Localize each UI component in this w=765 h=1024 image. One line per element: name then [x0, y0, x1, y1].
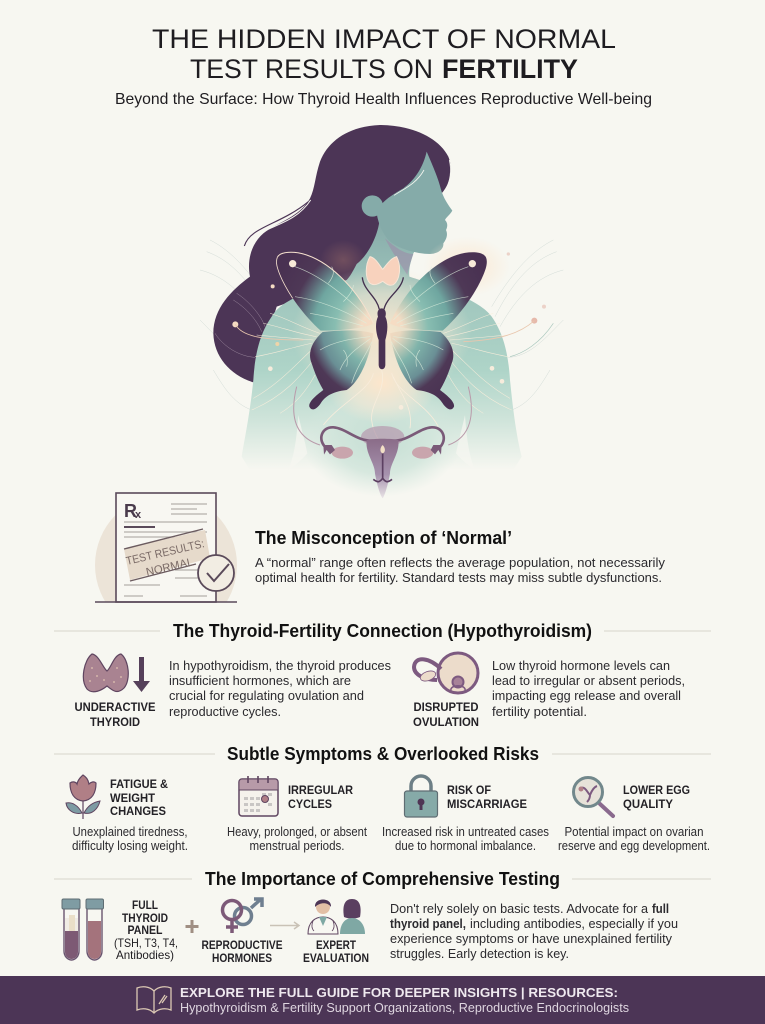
subtitle: Beyond the Surface: How Thyroid Health Influences Reproductive Well-being — [115, 91, 652, 108]
label: risk of miscarriage: RISK OF — [447, 783, 491, 797]
text: testing advice: struggles. Early detection is key. — [390, 946, 569, 961]
heading: comprehensive testing: The Importance of Comprehensive Testing — [205, 869, 560, 889]
label: risk of miscarriage — [447, 783, 527, 811]
label: reproductive hormones: REPRODUCTIVE — [202, 938, 282, 952]
heading: subtle symptoms: Subtle Symptoms & Overlooked Risks — [227, 744, 539, 764]
icon: Rx test results document: NORMAL — [145, 556, 195, 579]
text: hypothyroidism explanation: In hypothyroidism, the thyroid produces — [169, 658, 391, 673]
text: cycles description: menstrual periods. — [250, 838, 344, 853]
title: TEST RESULTS ON — [190, 54, 433, 84]
descending nerve lines — [323, 370, 438, 445]
icon: wilting tulip — [66, 775, 100, 819]
text: hypothyroidism explanation: insufficient hormones, which are — [169, 673, 351, 688]
text: misconception body: A “normal” range often reflects the average population, not necessarily — [255, 555, 665, 570]
icon: open book — [137, 987, 171, 1013]
energy dots — [232, 252, 553, 410]
label: lower egg quality: QUALITY — [623, 797, 673, 811]
text: fatigue description: difficulty losing weight. — [72, 838, 188, 853]
text: testing advice: full — [652, 901, 669, 916]
text: hypothyroidism explanation: crucial for regulating ovulation and — [169, 688, 364, 703]
text: egg quality description — [558, 824, 710, 853]
icon: padlock — [404, 776, 438, 817]
thyroid — [366, 257, 400, 285]
footer text: EXPLORE THE FULL GUIDE FOR DEEPER INSIGHTS | RESOURCES: — [180, 985, 618, 1000]
icon: calendar — [239, 776, 278, 816]
text: testing advice: Don't rely solely on basic tests. Advocate for a — [390, 901, 649, 916]
icon: magnifying glass — [574, 778, 613, 816]
label: full thyroid panel: (TSH, T3, T4, — [114, 936, 178, 950]
label: reproductive hormones — [202, 938, 282, 965]
panel: thyroid-fertility connection — [54, 621, 711, 729]
butterfly glow — [292, 237, 510, 423]
panel: misconception of normal — [95, 492, 665, 603]
energy rays — [252, 313, 512, 413]
label: disrupted ovulation: OVULATION — [413, 715, 479, 729]
text: cycles description — [227, 824, 367, 853]
label: fatigue: FATIGUE & — [110, 777, 168, 791]
label: risk of miscarriage: MISCARRIAGE — [447, 797, 527, 811]
uterus — [294, 387, 471, 498]
label: lower egg quality: LOWER EGG — [623, 783, 690, 797]
label: lower egg quality — [623, 783, 690, 811]
icon: Rx test results document — [95, 492, 237, 603]
title block — [115, 24, 652, 108]
text: testing advice: thyroid panel, — [390, 916, 466, 931]
text: hypothyroidism explanation — [169, 658, 391, 719]
icon: underactive thyroid — [83, 654, 150, 692]
label: full thyroid panel: PANEL — [128, 923, 162, 937]
label: underactive thyroid: UNDERACTIVE — [74, 700, 156, 714]
label: full thyroid panel: THYROID — [122, 911, 168, 925]
heading: thyroid-fertility connection: The Thyroid-Fertility Connection (Hypothyroidism) — [173, 621, 592, 641]
text: testing advice — [390, 901, 678, 961]
text: misconception body: optimal health for fertility. Standard tests may miss subtle dysfunctions. — [255, 570, 662, 585]
icon: doctor and patient — [308, 899, 365, 934]
footer text — [180, 985, 629, 1015]
title: THE HIDDEN IMPACT OF NORMAL — [152, 24, 616, 54]
icon: Rx test results document: TEST RESULTS: — [125, 538, 206, 568]
icon: disrupted ovulation — [414, 653, 478, 693]
text: fatigue description — [72, 824, 188, 853]
item: risk of miscarriage — [382, 776, 549, 853]
text: egg quality description: reserve and egg development. — [558, 838, 710, 853]
label: reproductive hormones: HORMONES — [212, 951, 272, 965]
label: disrupted ovulation: DISRUPTED — [414, 700, 479, 714]
text: ovulation explanation — [492, 658, 685, 719]
label: irregular cycles: CYCLES — [288, 797, 332, 811]
icon: gender symbols — [222, 899, 262, 933]
icon: Rx test results document: x — [135, 509, 142, 521]
icon: blood test tubes — [62, 899, 104, 960]
label: underactive thyroid — [74, 700, 156, 729]
underarm gaps — [288, 415, 475, 470]
text: testing advice: including antibodies, especially if you — [470, 916, 678, 931]
label: irregular cycles: IRREGULAR — [288, 783, 353, 797]
illustration: woman silhouette with butterfly — [200, 125, 563, 498]
hair — [213, 125, 451, 382]
body — [242, 213, 522, 470]
footer text: Hypothyroidism & Fertility Support Organizations, Reproductive Endocrinologists — [180, 1001, 629, 1015]
item: fatigue and weight changes — [66, 775, 188, 853]
neck shadow — [385, 238, 413, 275]
arrow — [270, 922, 299, 929]
label: expert evaluation: EVALUATION — [303, 951, 369, 965]
label: expert evaluation: EXPERT — [316, 938, 357, 952]
label: full thyroid panel — [114, 898, 178, 962]
label: full thyroid panel: Antibodies) — [116, 948, 174, 962]
label: fatigue: CHANGES — [110, 804, 166, 818]
far flowing lines — [200, 240, 563, 410]
text: ovulation explanation: fertility potential. — [492, 704, 587, 719]
torso lower fade — [302, 383, 462, 497]
label: full thyroid panel: FULL — [132, 898, 158, 912]
text: miscarriage description — [382, 824, 549, 853]
text: ovulation explanation: Low thyroid hormone levels can — [492, 658, 670, 673]
label: fatigue — [110, 777, 168, 818]
item: lower egg quality — [558, 778, 710, 853]
text: egg quality description: Potential impact on ovarian — [564, 824, 704, 839]
label: underactive thyroid: THYROID — [90, 715, 140, 729]
label: fatigue: WEIGHT — [110, 791, 156, 805]
text: miscarriage description: due to hormonal imbalance. — [395, 838, 536, 853]
icon: Rx test results document: R — [124, 501, 137, 521]
text: ovulation explanation: impacting egg release and overall — [492, 688, 681, 703]
title: FERTILITY — [442, 54, 578, 84]
label: disrupted ovulation — [413, 700, 479, 729]
footer banner — [0, 976, 765, 1024]
label: irregular cycles — [288, 783, 353, 811]
icon: plus — [186, 920, 198, 933]
panel: comprehensive testing — [54, 869, 711, 965]
text: miscarriage description: Increased risk in untreated cases — [382, 824, 549, 839]
text: ovulation explanation: lead to irregular or absent periods, — [492, 673, 685, 688]
butterfly — [277, 252, 487, 409]
label: expert evaluation — [303, 938, 369, 965]
text: misconception body — [255, 555, 665, 585]
item: irregular cycles — [227, 776, 367, 853]
text: hypothyroidism explanation: reproductive cycles. — [169, 704, 281, 719]
text: testing advice: experience symptoms or have unexplained fertility — [390, 931, 672, 946]
title — [152, 24, 616, 84]
heading: misconception: The Misconception of ‘Normal’ — [255, 528, 512, 548]
face — [362, 152, 452, 254]
panel: subtle symptoms and risks — [54, 744, 711, 853]
text: cycles description: Heavy, prolonged, or absent — [227, 824, 367, 839]
text: fatigue description: Unexplained tiredness, — [72, 824, 188, 839]
